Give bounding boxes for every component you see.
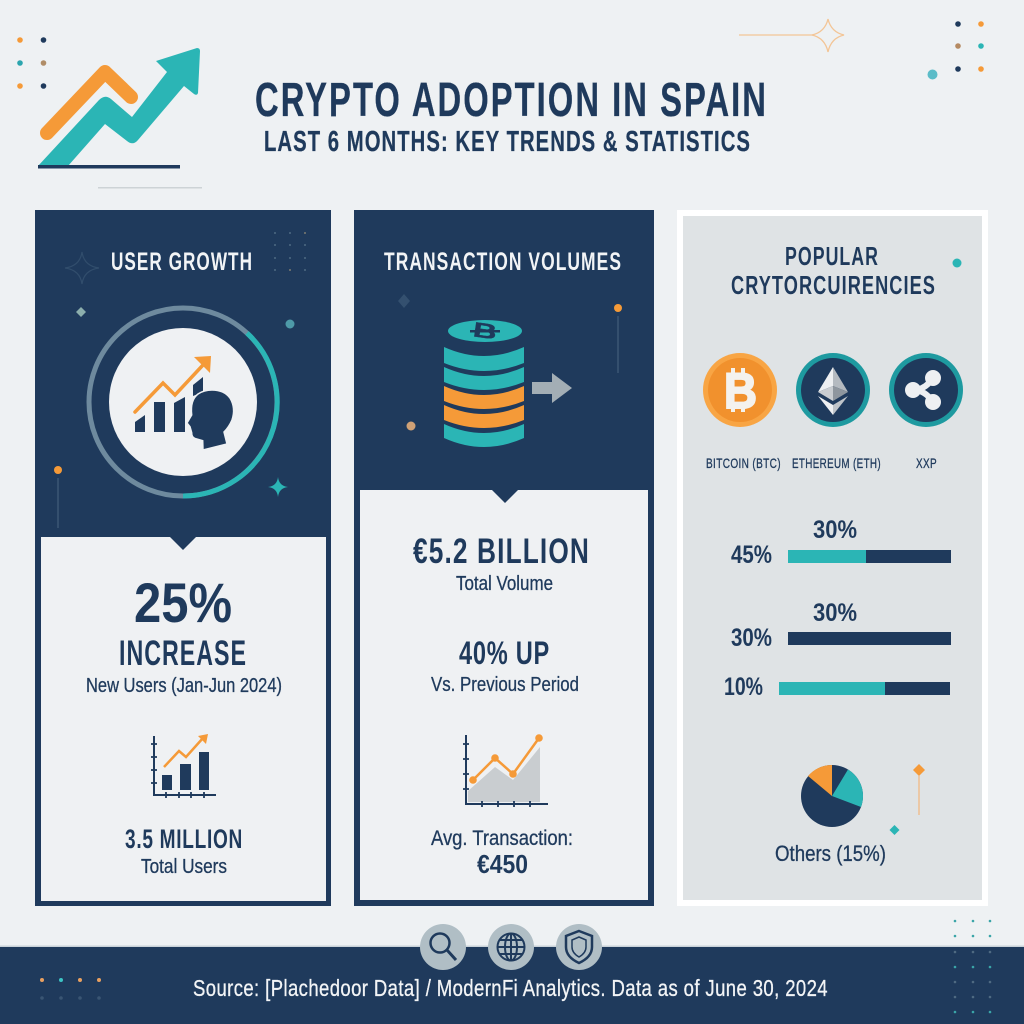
decorative accents: user growth header xyxy=(54,232,306,528)
icon: magnifier xyxy=(420,924,466,970)
decorative diamonds xyxy=(890,764,925,835)
panel: popular cryptocurrencies xyxy=(677,210,988,906)
stat label: increase: INCREASE xyxy=(119,634,247,673)
icon: bitcoin xyxy=(703,353,777,427)
footer band xyxy=(0,920,1024,1024)
icon: globe xyxy=(488,924,534,970)
icon: small area chart xyxy=(463,734,548,807)
heading: crytorcuirencies: CRYTORCUIRENCIES xyxy=(731,270,936,300)
bar chart: share bars xyxy=(724,516,951,701)
decorative star with line: top right xyxy=(739,19,844,52)
card: user growth stats xyxy=(41,537,326,901)
decorative dots: footer right xyxy=(954,920,991,1013)
stat: total users: 3.5 MILLION xyxy=(125,824,243,854)
heading: user growth: USER GROWTH xyxy=(111,248,253,276)
icon: xrp xyxy=(889,353,963,427)
bar 2 xyxy=(788,632,951,645)
bar 3 label: 10% xyxy=(724,673,763,701)
label: ethereum: ETHEREUM (ETH) xyxy=(792,455,881,471)
label: xxp: XXP xyxy=(916,455,937,471)
decorative dots: top left xyxy=(17,37,46,89)
icon: shield xyxy=(556,924,602,970)
bar 1 value: 30% xyxy=(813,516,857,544)
decorative dots: top right xyxy=(928,21,984,80)
icon: grey arrow xyxy=(532,373,572,403)
source line: Source: [Plachedoor Data] / ModernFi Analytics. Data as of June 30, 2024 xyxy=(193,975,828,1001)
title: CRYPTO ADOPTION IN SPAIN xyxy=(255,74,768,127)
bar 1 xyxy=(788,550,951,563)
panel: transaction volumes xyxy=(354,210,654,906)
stat: total volume: €5.2 BILLION xyxy=(413,532,590,571)
decorative dots: footer left xyxy=(40,978,101,1000)
bar 3 xyxy=(779,682,950,695)
stat: 40% up: 40% UP xyxy=(459,635,550,671)
heading: transaction volumes: TRANSACTION VOLUMES xyxy=(384,248,622,276)
caption: previous period: Vs. Previous Period xyxy=(431,674,579,696)
subtitle: LAST 6 MONTHS: KEY TRENDS & STATISTICS xyxy=(264,126,751,158)
caption: total users: Total Users xyxy=(141,856,227,878)
label: others: Others (15%) xyxy=(775,841,886,866)
caption: average transaction: Avg. Transaction: xyxy=(431,827,573,850)
icon: user growth ring with head and chart xyxy=(89,308,277,496)
heading: popular: POPULAR xyxy=(785,241,879,271)
card: transaction stats xyxy=(360,490,648,900)
icon: bitcoin: B xyxy=(724,363,757,419)
bar 2 label: 30% xyxy=(731,624,772,652)
bar 2 value: 30% xyxy=(813,599,857,627)
pie chart xyxy=(801,765,863,827)
icon: coin stack xyxy=(444,318,524,447)
decorative accents: transaction header xyxy=(398,294,622,430)
caption: new users: New Users (Jan-Jun 2024) xyxy=(86,675,282,697)
panel: user growth xyxy=(35,210,331,906)
caption: total volume: Total Volume xyxy=(456,573,553,595)
icon: header growth arrow logo xyxy=(38,48,202,188)
icon: small bar chart with arrow xyxy=(151,734,216,798)
stat: 450 euro: €450 xyxy=(477,849,528,879)
label: bitcoin: BITCOIN (BTC) xyxy=(706,455,781,471)
decorative dot: teal xyxy=(952,258,962,268)
stat: 25%: 25% xyxy=(134,571,232,634)
icon: ethereum xyxy=(796,353,870,427)
bar 1 label: 45% xyxy=(731,541,772,569)
icon: coin stack: B xyxy=(471,318,498,345)
